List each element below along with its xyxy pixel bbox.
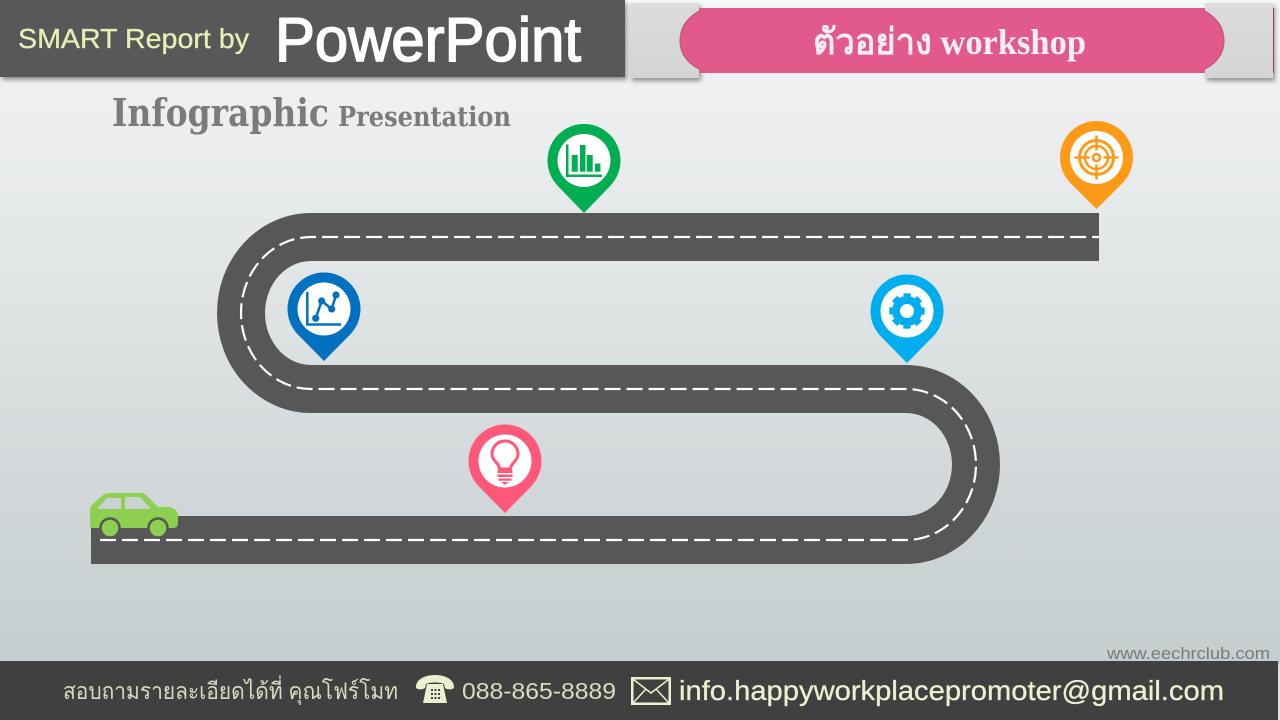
icon: gear [892, 296, 922, 326]
footer bar [0, 661, 1278, 720]
header label: SMART Report by: SMART Report by [18, 23, 249, 54]
subtitle: Infographic [112, 90, 329, 135]
header bar [0, 0, 625, 77]
email address: info.happyworkplacepromoter@gmail.com [679, 675, 1224, 706]
pin: line chart (blue) [288, 272, 360, 361]
winding road [91, 237, 1099, 540]
subtitle: Presentation [338, 102, 511, 133]
website url: www.eechrclub.com [1106, 644, 1270, 663]
icon: bar chart [566, 144, 602, 177]
banner title: ตัวอย่าง workshop [813, 22, 1086, 62]
pin: bar chart (green) [548, 124, 620, 213]
icon: target crosshair [1074, 136, 1118, 180]
header title: PowerPoint: PowerPoint [275, 6, 581, 75]
icon: telephone [416, 675, 454, 703]
pin: gear (cyan) [870, 274, 944, 363]
pin: light bulb (pink) [468, 424, 542, 513]
subtitle [112, 90, 511, 135]
icon: envelope [631, 677, 671, 705]
phone number: 088-865-8889 [462, 678, 616, 704]
pin: target (orange) [1060, 121, 1133, 209]
footer contact text: สอบถามรายละเอียดได้ที่ คุณโฟร์โมท [63, 675, 398, 705]
workshop banner [630, 3, 1274, 78]
icon: line chart [307, 291, 341, 324]
icon: light bulb [492, 441, 518, 485]
car [90, 493, 178, 538]
